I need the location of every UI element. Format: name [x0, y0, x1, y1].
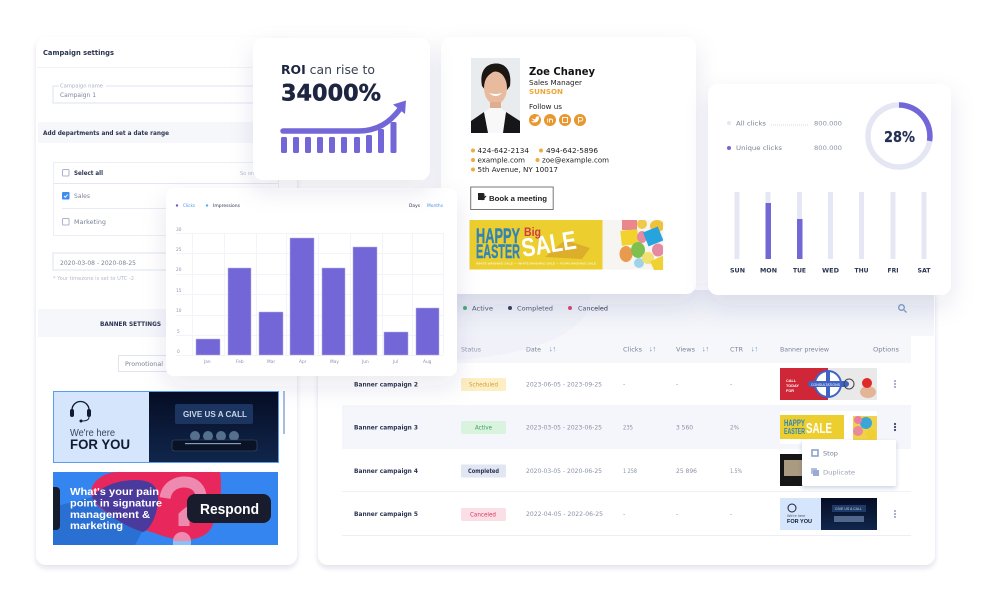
banner preview: for you: We're here	[787, 514, 805, 518]
department selector: Select all	[74, 170, 103, 177]
weekly bar chart: FRI	[888, 268, 898, 274]
banner: happy easter big sale: EASTER	[476, 241, 520, 263]
department selector	[54, 162, 278, 236]
banner: we're here for you: We're here	[70, 427, 115, 439]
chart legend: Clicks	[183, 203, 196, 209]
donut chart: 28%	[868, 105, 930, 167]
chart legend: Months	[427, 203, 444, 209]
field: date range: 2020-03-08 - 2020-08-25	[60, 259, 136, 267]
legend: all and unique clicks: 800.000	[814, 120, 842, 128]
button: book a meeting	[471, 187, 553, 210]
x axis labels: Feb	[236, 359, 244, 365]
table header: Date	[526, 346, 541, 354]
banner preview: easter sale: SALE	[806, 420, 832, 437]
table header: Banner preview	[780, 346, 829, 354]
chart legend	[176, 203, 444, 209]
table header: ↓↑	[649, 346, 656, 354]
button: respond: Respond	[200, 502, 259, 518]
banner: signature survey: What's your pain	[70, 487, 159, 498]
icon: search	[899, 305, 906, 312]
banner preview: consultations: TODAY	[786, 384, 799, 388]
banner: happy easter big sale: SALE	[519, 225, 578, 263]
field: campaign name: Campaign name	[60, 84, 103, 90]
heading: campaign settings: Campaign settings	[43, 48, 114, 57]
y axis labels: 10	[176, 308, 182, 314]
banner preview: consultations	[780, 368, 877, 400]
signature name block	[529, 66, 595, 111]
table header: Status	[461, 346, 481, 354]
row: Banner campaign 4: Completed	[468, 469, 499, 475]
banner: we're here for you	[54, 392, 278, 462]
row: Banner campaign 5	[354, 508, 733, 521]
banner: happy easter big sale: HAPPY	[476, 224, 520, 248]
banner: signature survey: point in signature	[70, 498, 162, 510]
phone with contact icons	[172, 431, 257, 451]
bars	[196, 238, 439, 355]
icon: headset	[70, 402, 91, 422]
banner preview: easter sale: HAPPY	[784, 418, 805, 429]
row: Banner campaign 2: Scheduled	[469, 382, 498, 388]
table legend: Active	[472, 304, 493, 312]
panel: clicks stats card	[708, 84, 951, 295]
row: Banner campaign 2: -	[676, 380, 679, 388]
contact details: 494-642-5896	[546, 146, 598, 155]
row: Banner campaign 2	[354, 378, 733, 391]
easter eggs and gifts	[620, 220, 663, 270]
y axis labels	[176, 227, 182, 355]
table header: Options	[873, 346, 899, 354]
weekly bar chart: MON	[760, 268, 777, 274]
row: Banner campaign 3: Banner campaign 3	[354, 424, 418, 432]
panel: email signature card	[441, 37, 696, 294]
y axis labels: 25	[176, 247, 182, 253]
soft glow behind floating cards	[290, 240, 590, 360]
contact details: 424-642-2134	[478, 146, 529, 155]
row: Banner campaign 3: 3 560	[676, 424, 693, 432]
weekly bar chart	[730, 192, 931, 274]
row: Banner campaign 2: -	[730, 380, 733, 388]
weekly bar chart: TUE	[793, 268, 806, 274]
y axis labels: 30	[176, 227, 182, 233]
x axis labels: Mar	[267, 359, 275, 365]
row: Banner campaign 3: Active	[475, 426, 492, 432]
table header: CTR	[730, 346, 744, 354]
panel: ROI card	[253, 38, 430, 180]
banner preview: consultations: FOR	[786, 389, 794, 393]
options popup menu: Duplicate	[823, 470, 855, 476]
banner preview: consultations: CONSULTATIONS	[811, 383, 841, 387]
row: Banner campaign 3: 2023-03-05 - 2023-06-25	[526, 424, 602, 432]
banner: signature survey: management &	[70, 510, 150, 521]
row: Banner campaign 2: 2023-06-05 - 2023-09-25	[526, 380, 602, 388]
donut chart: 28%: 28%	[884, 128, 915, 146]
banner preview: easter sale	[780, 411, 877, 444]
banner preview: for you: FOR YOU	[787, 519, 812, 525]
banner: signature survey: marketing	[70, 521, 123, 532]
banner preview: consultations: CALL	[786, 379, 797, 383]
panel: campaign settings	[36, 37, 297, 565]
y axis labels: 0	[177, 349, 180, 355]
row: Banner campaign 2: -	[623, 380, 626, 388]
table legend: Canceled	[578, 304, 608, 312]
field: date range: * Your timezone is set to UTC -2	[53, 276, 134, 282]
chart legend: Impressions	[213, 203, 241, 209]
row: Banner campaign 5: -	[676, 510, 679, 518]
photo: portrait	[471, 58, 520, 133]
dropdown: promotional	[118, 356, 178, 372]
department selector: So on	[240, 171, 254, 177]
contact details: zoe@example.com	[542, 156, 609, 164]
banner preview: dark	[780, 454, 820, 486]
banner: signature survey	[45, 472, 278, 550]
row: Banner campaign 5: -	[623, 510, 626, 518]
legend: all and unique clicks: 800.000	[814, 144, 842, 152]
contact details	[471, 146, 609, 174]
signature name block: Follow us	[529, 103, 562, 111]
legend: all and unique clicks: All clicks	[736, 120, 767, 128]
section band: departments	[38, 122, 296, 143]
options popup menu	[802, 440, 896, 486]
row: Banner campaign 3: 2%	[730, 424, 739, 432]
banner: happy easter big sale: Big	[524, 227, 541, 239]
row: Banner campaign 4: 25 896	[676, 467, 697, 475]
heading: ROI can rise to: ROI can rise to	[281, 63, 375, 77]
section band: departments: Add departments and set a date range	[43, 129, 170, 137]
field: date range	[53, 253, 290, 282]
legend: all and unique clicks	[727, 120, 842, 152]
table header	[342, 336, 911, 363]
field: campaign name	[53, 84, 290, 103]
row: Banner campaign 5: 2022-04-05 - 2022-06-25	[526, 510, 603, 518]
signature name block: Sales Manager	[529, 79, 582, 87]
table header: ↓↑	[702, 346, 709, 354]
x axis labels: Apr	[299, 359, 307, 365]
panel: monthly bar chart card	[166, 188, 457, 376]
x axis labels: Jan	[203, 359, 211, 365]
department selector: Marketing	[74, 219, 106, 226]
icons: social	[529, 114, 586, 126]
button: book a meeting: Book a meeting	[489, 194, 547, 203]
contact details: example.com	[478, 156, 525, 164]
grid lines	[176, 233, 444, 356]
weekly bar chart: SAT	[918, 268, 931, 274]
table legend: Completed	[517, 304, 553, 312]
options popup menu: Stop	[823, 450, 838, 458]
y axis labels: 20	[176, 267, 182, 273]
icons: row option dots	[894, 380, 896, 518]
banner: we're here for you: FOR YOU	[70, 436, 130, 452]
signature name block: SUNSON	[529, 88, 563, 96]
contact details: 5th Avenue, NY 10017	[478, 165, 558, 174]
banner: happy easter big sale	[470, 220, 664, 270]
scrollbar	[283, 391, 285, 434]
table header: Views	[676, 346, 695, 354]
figure: 34000%: 34000%	[281, 82, 381, 106]
row: Banner campaign 4: Banner campaign 4	[354, 467, 418, 475]
x axis labels: Jun	[361, 359, 369, 365]
table legend	[463, 304, 608, 312]
banner: happy easter big sale: WHITE WASHING SALE — WHITE WASHING SALE — FOAM WASHING SALE	[476, 262, 596, 266]
table header: ↓↑	[549, 346, 556, 354]
section band: banner settings	[38, 309, 296, 337]
table header: ↓↑	[751, 346, 758, 354]
signature name block: Zoe Chaney	[529, 66, 595, 78]
x axis labels: May	[330, 359, 339, 365]
dropdown: promotional: Promotional	[125, 361, 163, 368]
row: Banner campaign 4: 2020-03-05 - 2020-06-25	[526, 467, 602, 475]
row: Banner campaign 5: Canceled	[470, 512, 496, 518]
weekly bar chart: SUN	[730, 268, 745, 274]
y axis labels: 15	[176, 288, 182, 294]
row: Banner campaign 5: Banner campaign 5	[354, 510, 418, 518]
growth chart with arrow	[281, 100, 406, 153]
banner preview: for you	[780, 498, 877, 530]
weekly bar chart: WED	[822, 268, 839, 274]
row: Banner campaign 3	[354, 421, 739, 434]
panel: campaigns table	[318, 285, 935, 565]
row: Banner campaign 5: -	[730, 510, 733, 518]
row: Banner campaign 4	[354, 464, 742, 478]
button: respond	[187, 494, 271, 523]
x axis labels	[203, 359, 432, 365]
x axis labels: Jul	[392, 359, 398, 365]
table header: Clicks	[623, 346, 642, 354]
banner preview: for you: GIVE US A CALL	[835, 507, 862, 511]
banner preview: easter sale: EASTER	[784, 426, 805, 436]
field: campaign name: Campaign 1	[60, 91, 96, 99]
section band: banner settings: BANNER SETTINGS	[100, 321, 161, 328]
x axis labels: Aug	[423, 359, 432, 365]
weekly bar chart: THU	[854, 268, 869, 274]
chart legend: Days	[409, 203, 421, 209]
banner: we're here for you: GIVE US A CALL	[183, 410, 247, 419]
row: Banner campaign 2: Banner campaign 2	[354, 380, 418, 388]
row: Banner campaign 3: 235	[623, 424, 633, 432]
department selector: Sales	[74, 193, 90, 200]
legend: all and unique clicks: Unique clicks	[736, 144, 783, 152]
row: Banner campaign 4: 1 258	[623, 467, 637, 475]
row: Banner campaign 4: 1.5%	[730, 467, 742, 475]
y axis labels: 5	[177, 329, 180, 335]
